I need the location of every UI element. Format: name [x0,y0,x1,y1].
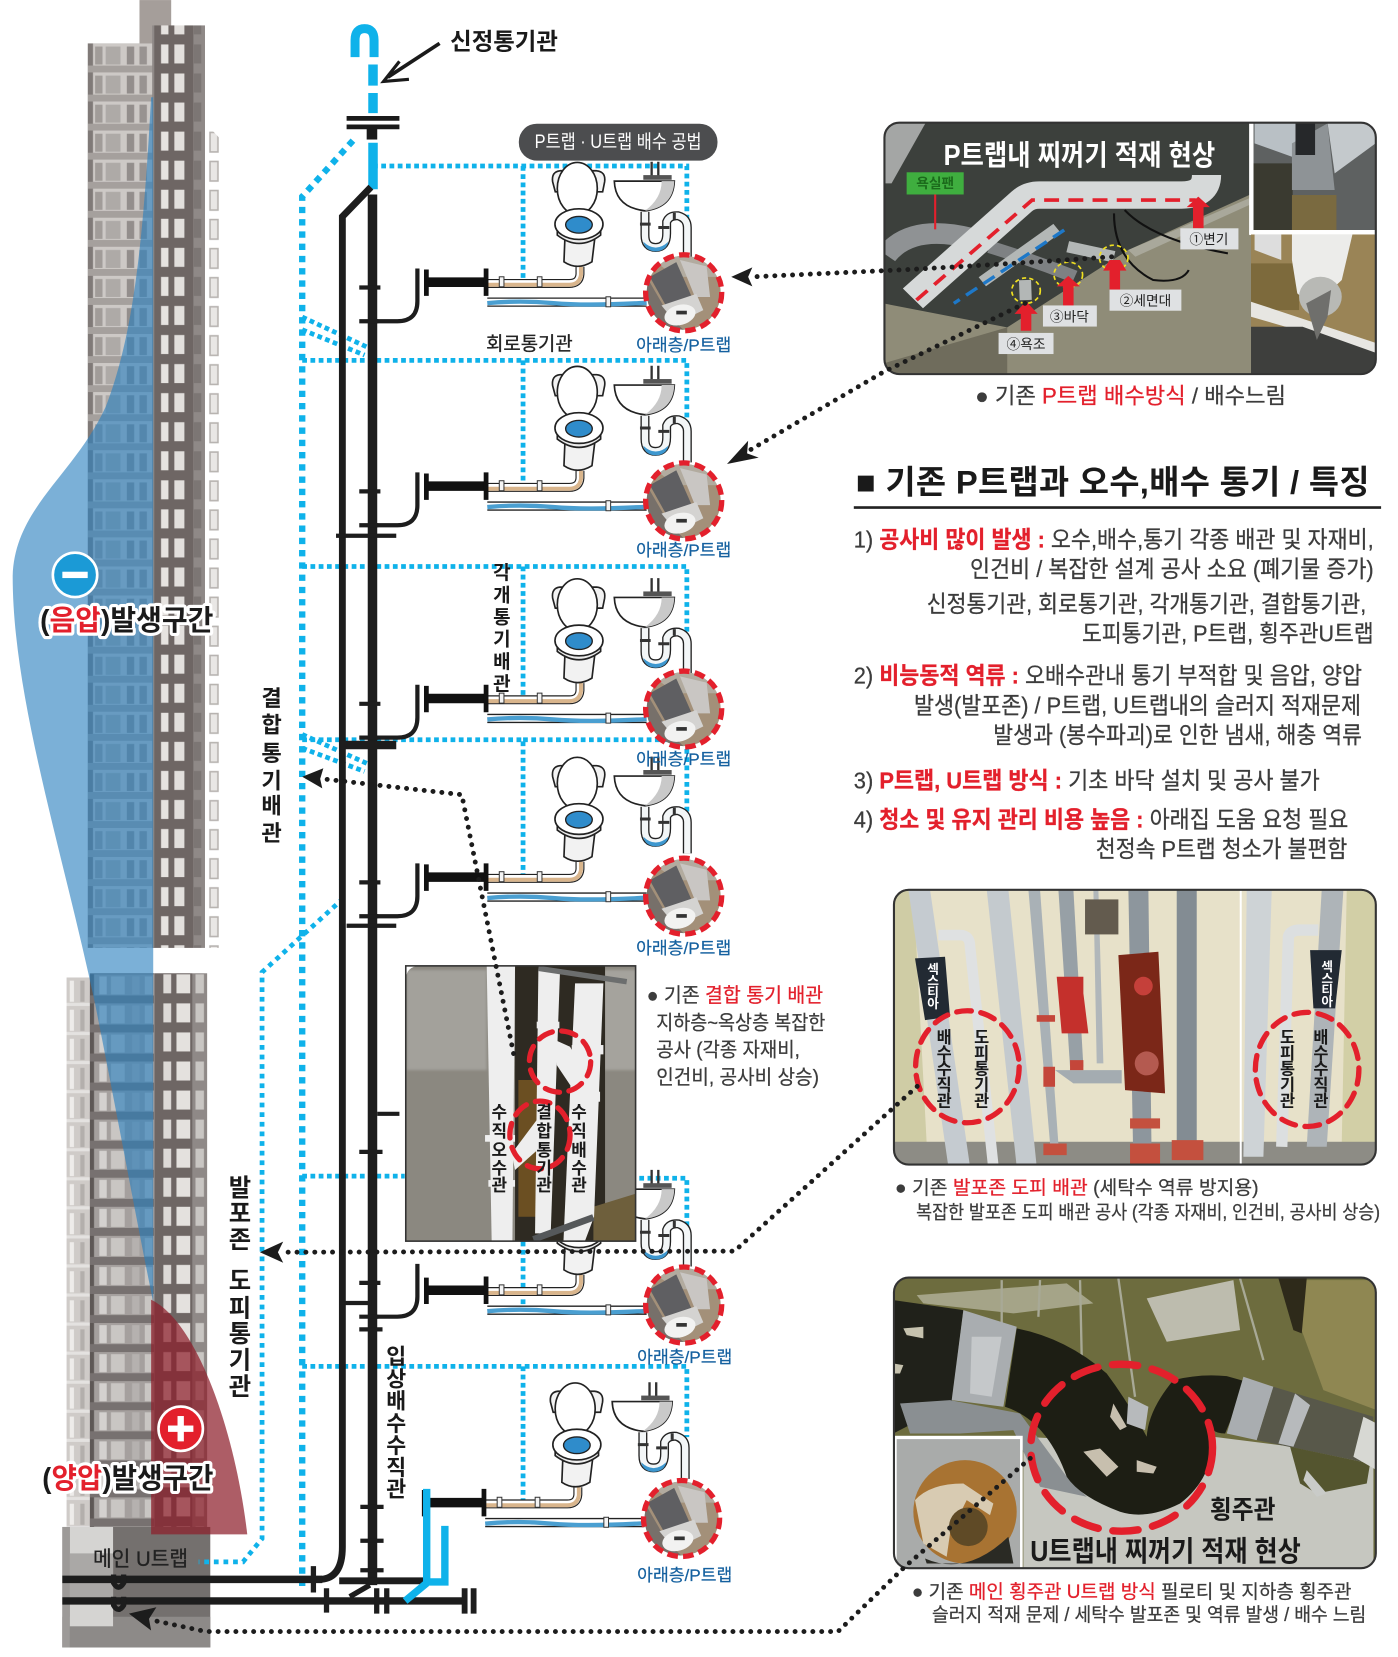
pill: P trap drainage method [519,124,717,161]
floor 5 fixtures [359,1170,722,1345]
caption: combined vent: 인건비, 공사비 상승) [656,1066,819,1089]
photo: P trap sludge: 욕실팬 [916,176,954,191]
caption: existing P trap: ● 기존 P트랩 배수방식 / 배수느림 [975,384,1286,409]
photo: P trap sludge: ①변기 [1189,232,1228,247]
label: loop vent: 회로통기관 [486,333,573,355]
caption: relief vent [895,1177,1380,1223]
feature list: 발생(발포존) / P트랩, U트랩내의 슬러지 적재문제 [914,692,1361,718]
floor labels: 아래층/P트랩 [636,750,731,769]
photo: relief vent piping: 도피통기관 [974,1029,989,1110]
vent pipe flanges [347,118,399,140]
photo: P trap sludge: ④욕조 [1007,337,1046,352]
label: negative pressure: (음압)발생구간 [40,605,213,637]
photo: relief vent piping: 섹스티아 [1321,960,1333,1009]
heading rule [854,506,1381,509]
floor labels: 아래층/P트랩 [636,336,731,355]
label: individual vent: 각개통기배관 [493,562,511,695]
photo: combined vent pipes: 결합통기관 [536,1103,552,1195]
caption: main U trap: 슬러지 적재 문제 / 세탁수 발포존 및 역류 발생 / 배수 느림 [932,1604,1366,1626]
dotted arrow: relief vent [260,1086,917,1263]
photo: P trap sludge: P트랩내 찌꺼기 적재 현상 [944,140,1215,172]
floor labels [636,336,732,1585]
photo: relief vent piping: 배수수직관 [1313,1029,1328,1110]
photo: P trap sludge: ③바닥 [1050,309,1089,324]
photo: relief vent piping: 섹스티아 [927,962,939,1011]
vent pipe cap [355,29,374,189]
arrow: new vent pipe [384,43,440,81]
plus icon [159,1407,203,1451]
floor 6 fixtures [424,1382,720,1559]
feature list: 신정통기관, 회로통기관, 각개통기관, 결합통기관, [927,591,1366,617]
floor 2 fixtures [359,366,722,541]
floor 3 fixtures [359,578,722,749]
floor labels: 아래층/P트랩 [636,939,731,958]
feature list: 도피통기관, P트랩, 횡주관U트랩 [1082,620,1374,646]
dotted arrow: P trap to floor 2 [727,303,1025,464]
cyan vent dotted lines [199,141,687,1590]
horizontal main pipes [62,1566,474,1614]
photo: combined vent pipes [405,965,637,1243]
label: relief vent: 발포존도피통기관 [229,1175,251,1401]
feature list: 2) 비능동적 역류 : 오배수관내 통기 부적합 및 음압, 양압 [854,663,1362,689]
photo: main horizontal U trap sludge [890,1275,1380,1572]
label: new vent pipe: 신정통기관 [450,29,558,55]
dotted arrow: combined vent [302,768,514,1054]
caption: combined vent: 지하층~옥상층 복잡한 [656,1011,825,1034]
label: vertical drain stack: 입상배수수직관 [386,1344,406,1501]
floor labels: 아래층/P트랩 [637,1566,732,1585]
floor 4 fixtures [359,757,722,936]
feature list: 천정속 P트랩 청소가 불편함 [1096,836,1347,862]
photo: relief vent piping: 배수수직관 [937,1029,952,1110]
vertical main drain pipes [321,187,399,1585]
label: positive pressure: (양압)발생구간 [42,1463,213,1495]
photo: combined vent pipes: 수직배수관 [571,1103,587,1195]
floor labels: 아래층/P트랩 [636,541,731,560]
photo: relief vent piping: 도피통기관 [1280,1029,1295,1110]
minus icon [53,553,97,597]
negative pressure zone [13,97,153,1302]
floor labels: 아래층/P트랩 [637,1348,732,1367]
caption: combined vent [647,984,825,1089]
label: combined vent: 결합통기배관 [261,686,282,846]
dotted arrow: main U trap [129,1458,1030,1632]
positive pressure zone [151,1300,247,1534]
feature list: 1) 공사비 많이 발생 : 오수,배수,통기 각종 배관 및 자재비, [854,526,1374,552]
photo: P trap sludge [876,117,1377,383]
dotted arrow: P trap to floor 1 [731,257,1112,286]
feature list: 3) P트랩, U트랩 방식 : 기초 바닥 설치 및 공사 불가 [854,767,1320,793]
label: main U trap: 메인 U트랩 [93,1547,188,1571]
photo: main horizontal U trap sludge: U트랩내 찌꺼기 적재 현상 [1030,1536,1301,1568]
feature list: 발생과 (봉수파괴)로 인한 냄새, 해충 역류 [993,722,1362,748]
caption: main U trap [912,1581,1366,1626]
feature list [854,526,1374,862]
photo: combined vent pipes: 수직오수관 [492,1103,508,1195]
caption: combined vent: ● 기존 결합 통기 배관 [647,984,823,1007]
caption: main U trap: ● 기존 메인 횡주관 U트랩 방식 필로티 및 지하층 횡주관 [912,1581,1352,1603]
feature list: 인건비 / 복잡한 설계 공사 소요 (폐기물 증가) [970,556,1374,582]
apartment tower illustration [62,0,221,1647]
photo: main horizontal U trap sludge: 횡주관 [1210,1497,1275,1525]
caption: relief vent: ● 기존 발포존 도피 배관 (세탁수 역류 방지용) [895,1177,1259,1199]
feature list: 4) 청소 및 유지 관리 비용 높음 : 아래집 도움 요청 필요 [854,806,1348,832]
cyan standpipe at base [405,1489,445,1601]
caption: combined vent: 공사 (각종 자재비, [656,1039,800,1062]
heading: features: ■ 기존 P트랩과 오수,배수 통기 / 특징 [856,464,1369,501]
pill: P trap drainage method: P트랩 · U트랩 배수 공법 [535,131,702,153]
floor 1 fixtures [359,162,722,333]
photo: relief vent piping [890,887,1380,1170]
photo: P trap sludge: ②세면대 [1120,293,1171,308]
